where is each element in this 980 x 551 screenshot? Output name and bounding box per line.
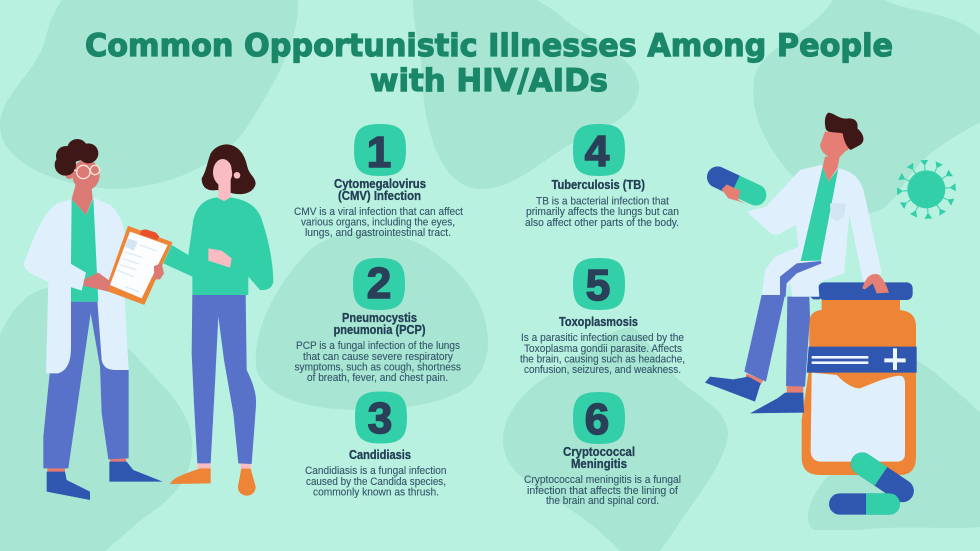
doctor	[24, 139, 163, 500]
description 2: of breath, fever, and chest pain.	[307, 372, 448, 384]
item 3	[305, 392, 446, 498]
number 3: 3	[368, 394, 392, 443]
pills	[829, 448, 918, 515]
title	[85, 28, 893, 99]
description 5: confusion, seizures, and weakness.	[524, 364, 681, 376]
heading 4: Tuberculosis (TB)	[552, 178, 645, 192]
heading 5: Toxoplasmosis	[559, 315, 638, 329]
description 3: caused by the Candida species,	[306, 476, 446, 488]
description 4: also affect other parts of the body.	[525, 217, 679, 229]
number 1: 1	[367, 128, 391, 177]
description 2: that can cause severe respiratory	[303, 351, 454, 363]
description 3: Candidiasis is a fungal infection	[305, 465, 446, 477]
badge 2	[353, 258, 405, 310]
badge 3	[355, 392, 407, 444]
description 6: the brain and spinal cord.	[546, 495, 659, 507]
item 1	[294, 124, 463, 239]
number 4: 4	[585, 127, 610, 176]
title: with HIV/AIDs	[370, 63, 608, 99]
badge 6	[573, 392, 625, 444]
description 4: TB is a bacterial infection that	[536, 196, 669, 208]
heading 6	[563, 445, 635, 471]
number 2: 2	[367, 259, 391, 308]
description 5: Is a parasitic infection caused by the	[521, 332, 684, 344]
item 5	[520, 258, 685, 376]
heading 3: Candidiasis	[349, 448, 411, 462]
description 2: symptoms, such as cough, shortness	[294, 362, 462, 374]
seated doctor	[703, 113, 889, 413]
description 3: commonly known as thrush.	[313, 486, 439, 498]
description 6	[524, 474, 681, 507]
description 2: PCP is a fungal infection of the lungs	[296, 340, 461, 352]
description 5: the brain, causing such as headache,	[520, 354, 685, 366]
description 1: CMV is a viral infection that can affect	[294, 206, 463, 218]
badge 1	[354, 124, 406, 176]
heading 2: pneumonia (PCP)	[334, 323, 426, 337]
heading 6: Cryptococcal	[563, 445, 635, 459]
description 2	[294, 340, 462, 384]
patient	[154, 144, 273, 496]
item 4	[525, 124, 679, 229]
icon: virus	[897, 160, 956, 219]
description 1: various organs, including the eyes,	[301, 216, 455, 228]
description 1	[294, 206, 463, 239]
heading 1: Cytomegalovirus	[334, 177, 426, 191]
description 1: lungs, and gastrointestinal tract.	[305, 227, 451, 239]
pill bottle	[802, 282, 917, 475]
heading 1	[334, 177, 426, 203]
description 4: primarily affects the lungs but can	[526, 206, 679, 218]
badge 5	[573, 258, 625, 310]
heading 1: (CMV) Infection	[338, 189, 421, 203]
doctor hand	[83, 273, 111, 292]
illustration: doctor on pill bottle	[703, 113, 956, 515]
description 3	[305, 465, 446, 498]
description 6: Cryptococcal meningitis is a fungal	[524, 474, 681, 486]
clipboard	[106, 227, 172, 304]
item 6	[524, 392, 681, 507]
heading 6: Meningitis	[571, 457, 627, 471]
description 5: Toxoplasma gondii parasite. Affects	[524, 343, 683, 355]
description 5	[520, 332, 685, 376]
heading 2	[334, 311, 426, 337]
number 6: 6	[585, 395, 609, 444]
item 2	[294, 258, 462, 384]
description 4	[525, 196, 679, 229]
number 5: 5	[586, 261, 610, 310]
description 6: infection that affects the lining of	[527, 485, 679, 497]
illustration: doctor with clipboard and patient	[24, 139, 273, 500]
heading 2: Pneumocystis	[342, 311, 417, 325]
title: Common Opportunistic Illnesses Among People	[85, 28, 893, 64]
badge 4	[573, 124, 625, 176]
